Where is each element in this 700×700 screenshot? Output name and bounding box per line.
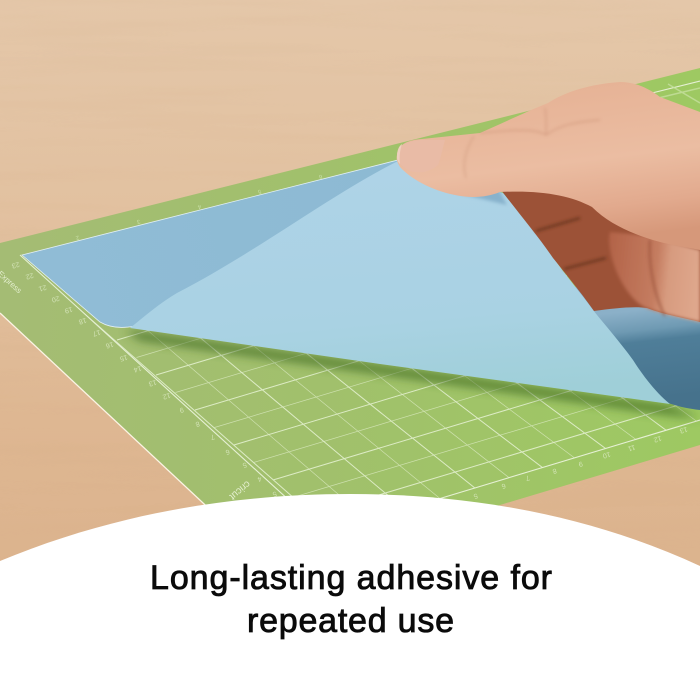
left ruler numbers: 8 — [194, 420, 200, 427]
index finger knuckle shading — [480, 108, 600, 135]
bottom ruler numbers: 12 — [653, 434, 662, 443]
sheet underside right — [560, 285, 700, 410]
thumb knuckle creases — [464, 136, 474, 178]
top ruler numbers: 4 — [196, 203, 202, 210]
left ruler numbers: 15 — [119, 353, 128, 362]
hand holding sheet — [397, 82, 700, 322]
mat brand marks: cricut — [227, 478, 252, 502]
top ruler numbers: 5 — [256, 188, 262, 195]
left ruler numbers: 21 — [38, 283, 47, 292]
sheet lifted light section — [130, 161, 670, 404]
back of hand and thumb — [397, 82, 700, 250]
left ruler numbers: 4 — [256, 475, 262, 482]
top ruler numbers: 6 — [317, 173, 323, 180]
left ruler numbers: 12 — [162, 391, 171, 400]
thumbnail — [397, 140, 445, 172]
right corner grid lines — [650, 84, 700, 103]
blue sheet, underside of peeled corner — [22, 160, 700, 410]
top ruler numbers: 2 — [74, 234, 80, 241]
cutting mat — [0, 68, 700, 506]
inner fingers in shadow — [498, 186, 700, 322]
finger separation lines — [650, 240, 665, 316]
caption line one: Long-lasting adhesive for — [150, 559, 552, 597]
left ruler numbers: 16 — [105, 340, 114, 349]
left ruler numbers: 5 — [241, 461, 247, 468]
left ruler numbers: 7 — [209, 433, 215, 440]
bottom ruler numbers: 13 — [679, 425, 688, 434]
mat brand marks — [0, 269, 252, 502]
left ruler numbers: 14 — [133, 364, 142, 373]
mat base — [0, 68, 700, 575]
top ruler numbers: 3 — [135, 218, 141, 225]
shadow under lifted sheet — [125, 330, 700, 418]
top ruler numbers — [74, 173, 323, 241]
bottom ruler numbers: 8 — [551, 467, 557, 474]
left ruler numbers: 9 — [178, 406, 184, 413]
bottom ruler numbers: 6 — [500, 482, 506, 489]
left ruler numbers: 6 — [224, 448, 230, 455]
sheet flat dark section — [22, 160, 420, 330]
left ruler numbers: 18 — [78, 316, 87, 325]
left ruler numbers: 17 — [92, 328, 101, 337]
bottom ruler numbers: 7 — [524, 474, 530, 481]
bottom ruler numbers: 9 — [577, 460, 583, 467]
thumbnail tip — [397, 144, 402, 164]
bottom ruler numbers: 5 — [472, 492, 478, 499]
bottom ruler numbers: 10 — [602, 450, 611, 459]
left ruler numbers: 20 — [51, 294, 60, 303]
left ruler numbers: 19 — [64, 305, 73, 314]
left ruler numbers: 23 — [11, 260, 20, 269]
mat grid — [80, 274, 696, 498]
caption heading — [150, 559, 552, 640]
caption line two: repeated use — [247, 602, 454, 640]
fingers lit lower right — [609, 232, 700, 322]
left ruler numbers: 5 — [271, 490, 277, 497]
left ruler numbers: 22 — [25, 271, 34, 280]
left ruler numbers: 13 — [148, 378, 157, 387]
left ruler numbers — [11, 260, 277, 497]
mat white left edge — [0, 313, 280, 575]
thumb cast shadow — [415, 175, 507, 205]
finger crease shading — [536, 218, 606, 269]
mat grid border lines — [20, 81, 700, 533]
bottom ruler numbers — [472, 425, 688, 499]
bottom ruler numbers: 11 — [627, 443, 636, 452]
white caption panel — [0, 494, 700, 700]
